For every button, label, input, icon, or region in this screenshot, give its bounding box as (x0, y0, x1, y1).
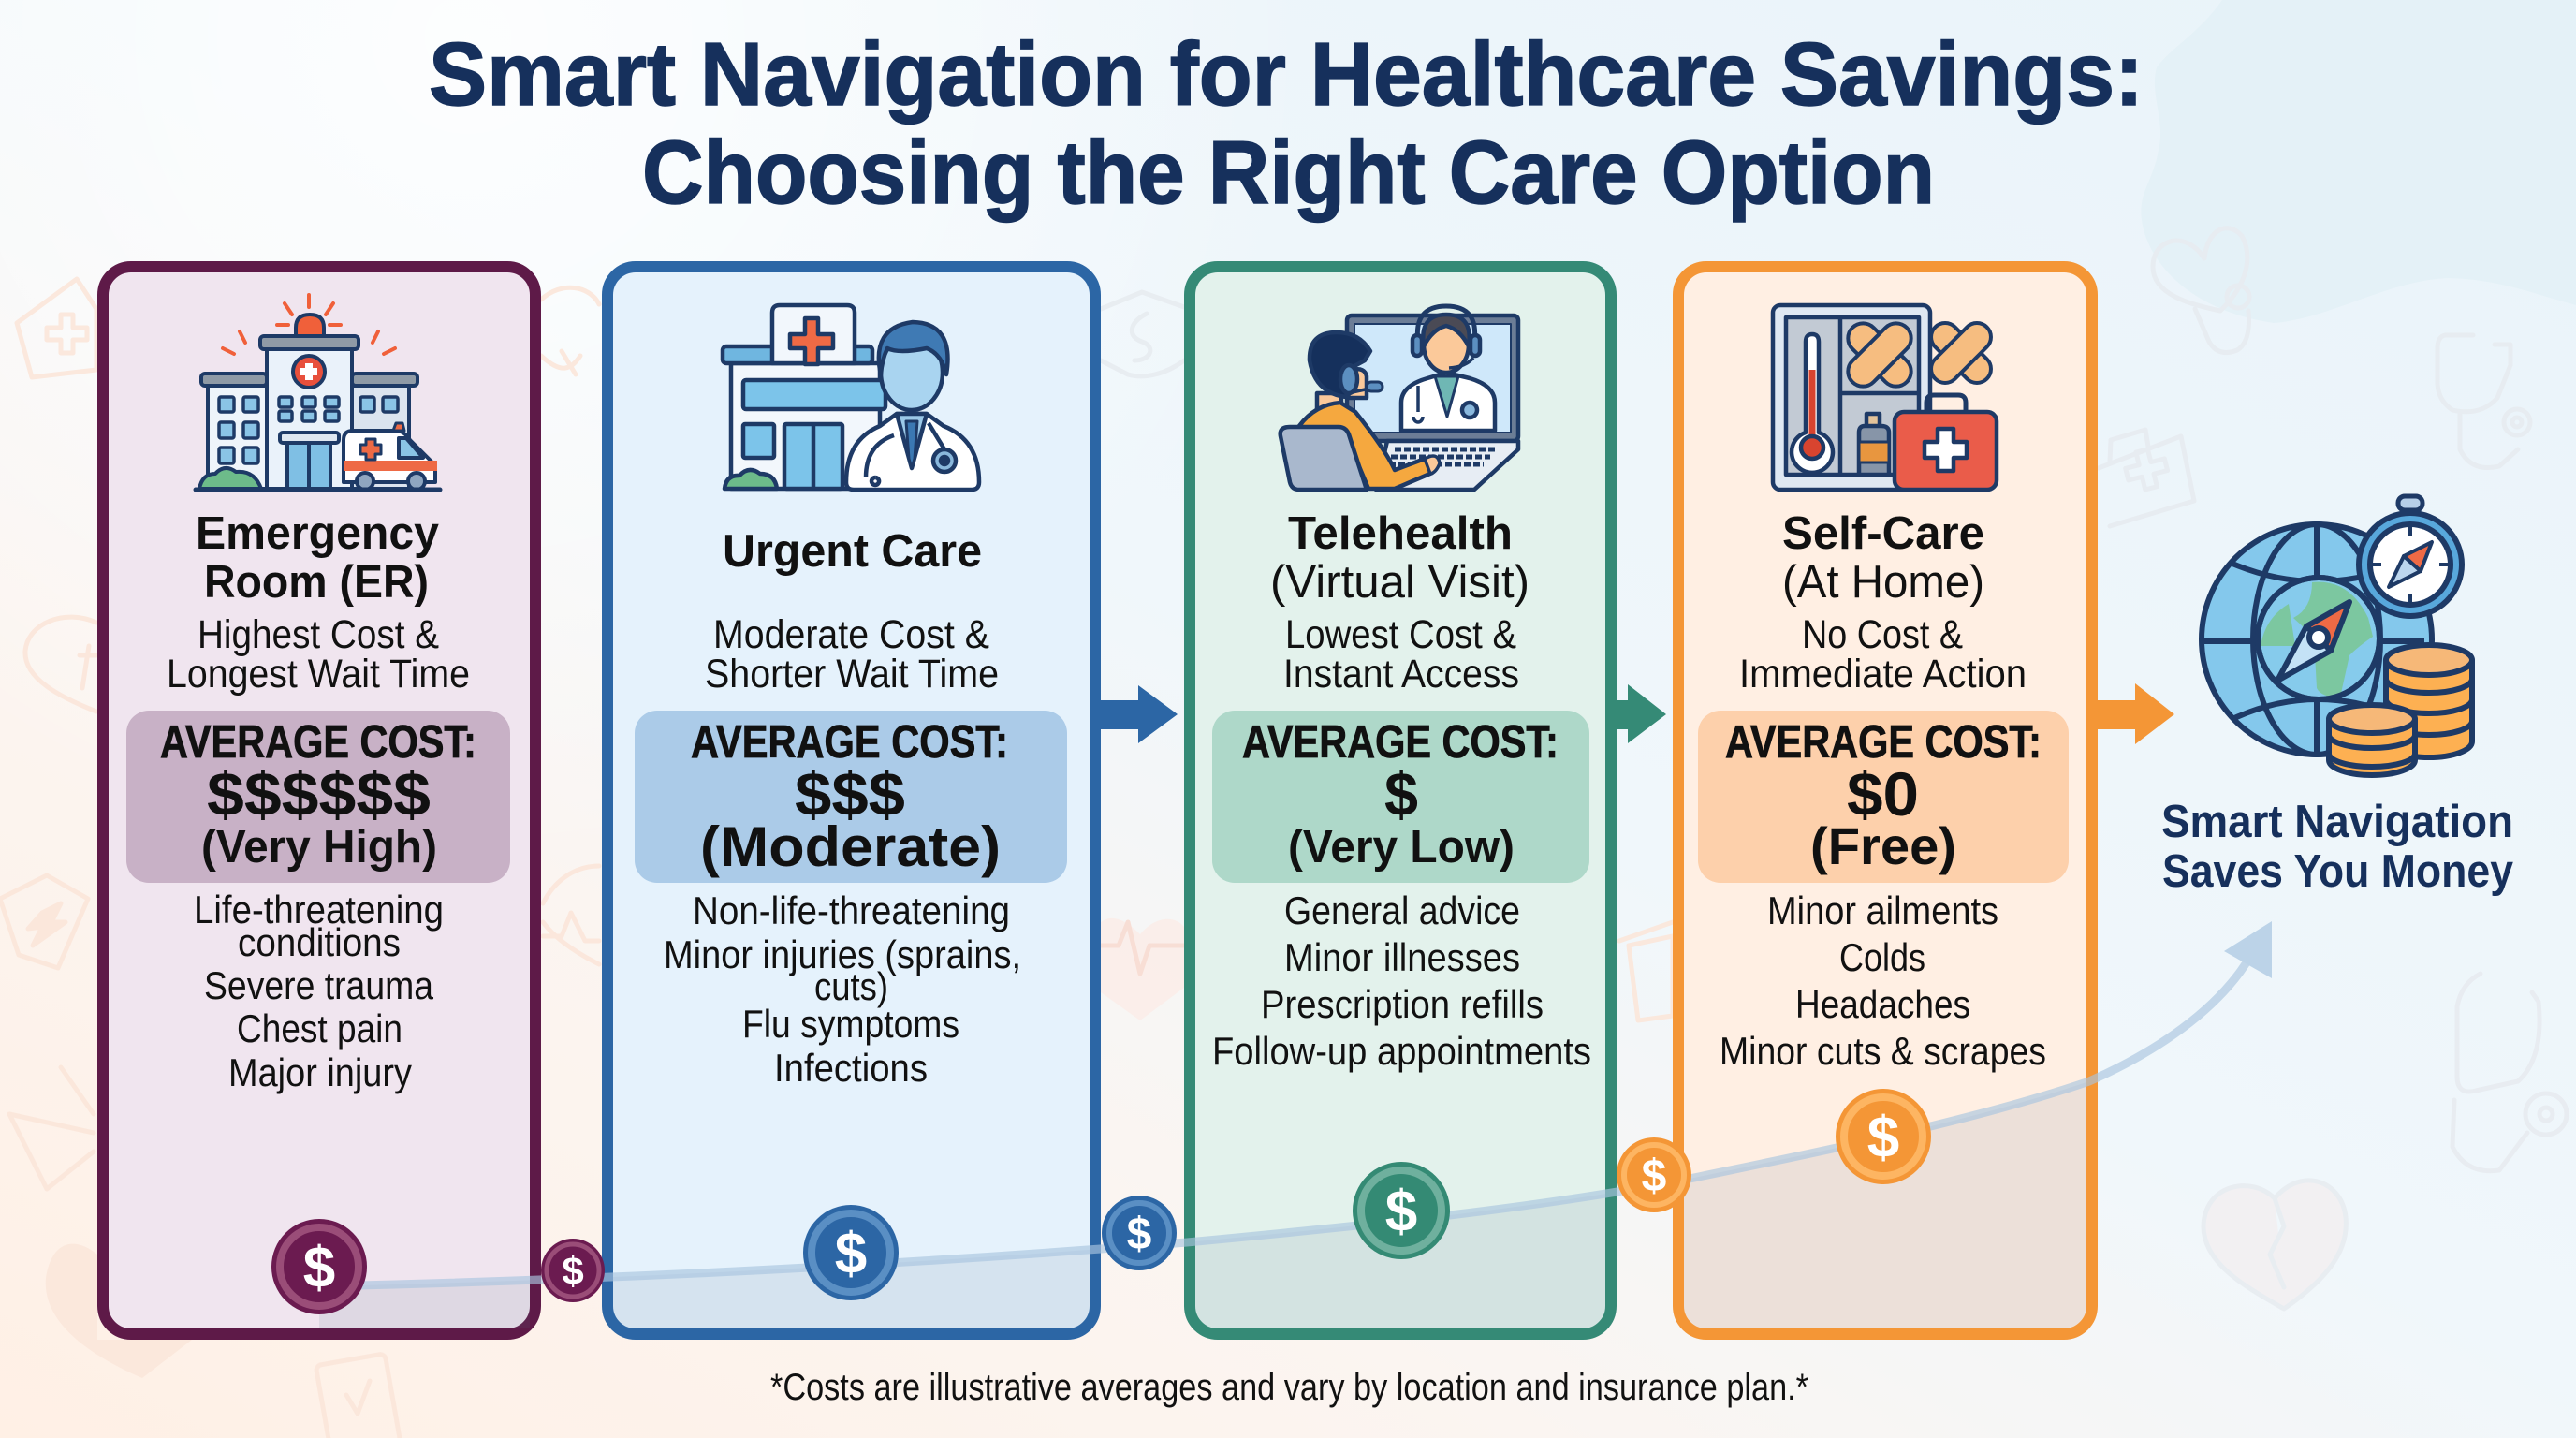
average cost box: AVERAGE COST: (1725, 717, 2042, 768)
icon: telehealth call (1281, 306, 1518, 490)
callout: smart navigation saves you money (2161, 797, 2513, 897)
list of uses: Colds (1839, 935, 1925, 979)
average cost box: (Free) (1810, 816, 1956, 875)
summary: Highest Cost & (198, 612, 439, 657)
average cost box: $$$ (795, 759, 905, 829)
average cost box (1698, 711, 2069, 883)
list of uses: Flu symptoms (742, 1002, 959, 1046)
list of uses: Follow-up appointments (1212, 1029, 1591, 1073)
summary (1283, 612, 1519, 697)
heading: (Virtual Visit) (1270, 557, 1530, 608)
summary (167, 612, 470, 697)
coin: between urgent and telehealth: $ (1127, 1210, 1152, 1259)
average cost box (1212, 711, 1589, 883)
list of uses: Life-threatening (194, 888, 444, 932)
list of uses: Non-life-threatening (693, 888, 1010, 932)
list of uses (1212, 888, 1591, 1073)
average cost box: $ (1384, 759, 1418, 829)
title: Smart Navigation for Healthcare Savings: (429, 24, 2144, 125)
summary: Moderate Cost & (713, 612, 989, 657)
heading: Urgent Care (723, 526, 982, 577)
list of uses (1720, 888, 2046, 1073)
list of uses: Major injury (228, 1050, 412, 1094)
icon: clinic with doctor (723, 305, 979, 490)
list of uses: Minor ailments (1767, 888, 1998, 932)
list of uses: Prescription refills (1261, 982, 1544, 1026)
average cost box: $$$$$$ (207, 759, 431, 829)
summary (1739, 612, 2027, 697)
list of uses: cuts) (814, 964, 888, 1008)
coin: self-care: $ (1867, 1106, 1899, 1170)
average cost box (635, 711, 1067, 883)
heading: Telehealth (1288, 508, 1513, 559)
callout: smart navigation saves you money: Smart Navigation (2161, 797, 2513, 847)
list of uses: Minor cuts & scrapes (1720, 1029, 2046, 1073)
summary: Immediate Action (1739, 652, 2027, 697)
summary: Shorter Wait Time (705, 652, 999, 697)
coin: telehealth (1353, 1162, 1450, 1259)
panel: self-care (1678, 267, 2092, 1334)
heading: Room (ER) (204, 557, 429, 608)
callout: smart navigation saves you money: Saves You Money (2162, 846, 2513, 897)
coin: between telehealth and self-care (1617, 1137, 1691, 1212)
summary: Longest Wait Time (167, 652, 470, 697)
arrow: urgent care to telehealth (1095, 685, 1178, 743)
average cost box: AVERAGE COST: (1242, 717, 1559, 768)
arrow: self-care to smart navigation (2092, 683, 2174, 744)
icon: home first aid (1773, 305, 1997, 490)
list of uses (664, 888, 1021, 1090)
coin: between emergency and urgent (541, 1239, 605, 1302)
coin: emergency room: $ (303, 1236, 335, 1300)
heading (1782, 508, 1984, 608)
average cost box: (Very Low) (1288, 822, 1515, 873)
average cost box: $0 (1847, 759, 1919, 829)
list of uses: Headaches (1795, 982, 1970, 1026)
coin: self-care (1836, 1089, 1931, 1184)
heading (1270, 508, 1530, 608)
heading (196, 508, 439, 608)
coin: urgent care (803, 1205, 899, 1300)
heading: (At Home) (1782, 557, 1984, 608)
list of uses: Infections (774, 1046, 928, 1090)
list of uses: conditions (238, 920, 401, 964)
heading: Emergency (196, 508, 439, 559)
list of uses: Severe trauma (204, 963, 434, 1007)
list of uses: Minor injuries (sprains, (664, 932, 1021, 976)
panel: telehealth (1190, 267, 1611, 1334)
arrow: telehealth to self-care (1610, 684, 1666, 743)
coin: between urgent and telehealth (1102, 1196, 1177, 1270)
summary: Instant Access (1283, 652, 1519, 697)
coin: between emergency and urgent: $ (562, 1249, 584, 1293)
average cost box: AVERAGE COST: (160, 717, 476, 768)
summary: No Cost & (1802, 612, 1963, 657)
heading: Self-Care (1782, 508, 1984, 559)
coin: between telehealth and self-care: $ (1642, 1152, 1667, 1201)
title: Choosing the Right Care Option (642, 123, 1935, 223)
average cost box (126, 711, 510, 883)
icon: hospital with ambulance (196, 295, 440, 490)
dollar coins (271, 1089, 1931, 1314)
average cost box: AVERAGE COST: (691, 717, 1008, 768)
average cost box: (Very High) (201, 822, 437, 873)
coin: emergency room (271, 1219, 367, 1314)
coin: telehealth: $ (1385, 1180, 1417, 1244)
list of uses: General advice (1284, 888, 1520, 932)
list of uses: Minor illnesses (1284, 935, 1520, 979)
panel: emergency room (103, 267, 535, 1334)
summary (705, 612, 999, 697)
icon: globe, compass and coins (2202, 496, 2472, 775)
footnote: *Costs are illustrative averages and vary by location and insurance plan.* (770, 1367, 1808, 1408)
list of uses: Chest pain (237, 1006, 402, 1050)
average cost box: (Moderate) (700, 815, 1001, 878)
savings trend curve (319, 921, 2272, 1328)
list of uses (194, 888, 444, 1094)
title (429, 24, 2144, 223)
panel: urgent care (607, 267, 1095, 1334)
summary: Lowest Cost & (1285, 612, 1516, 657)
coin: urgent care: $ (835, 1222, 867, 1286)
